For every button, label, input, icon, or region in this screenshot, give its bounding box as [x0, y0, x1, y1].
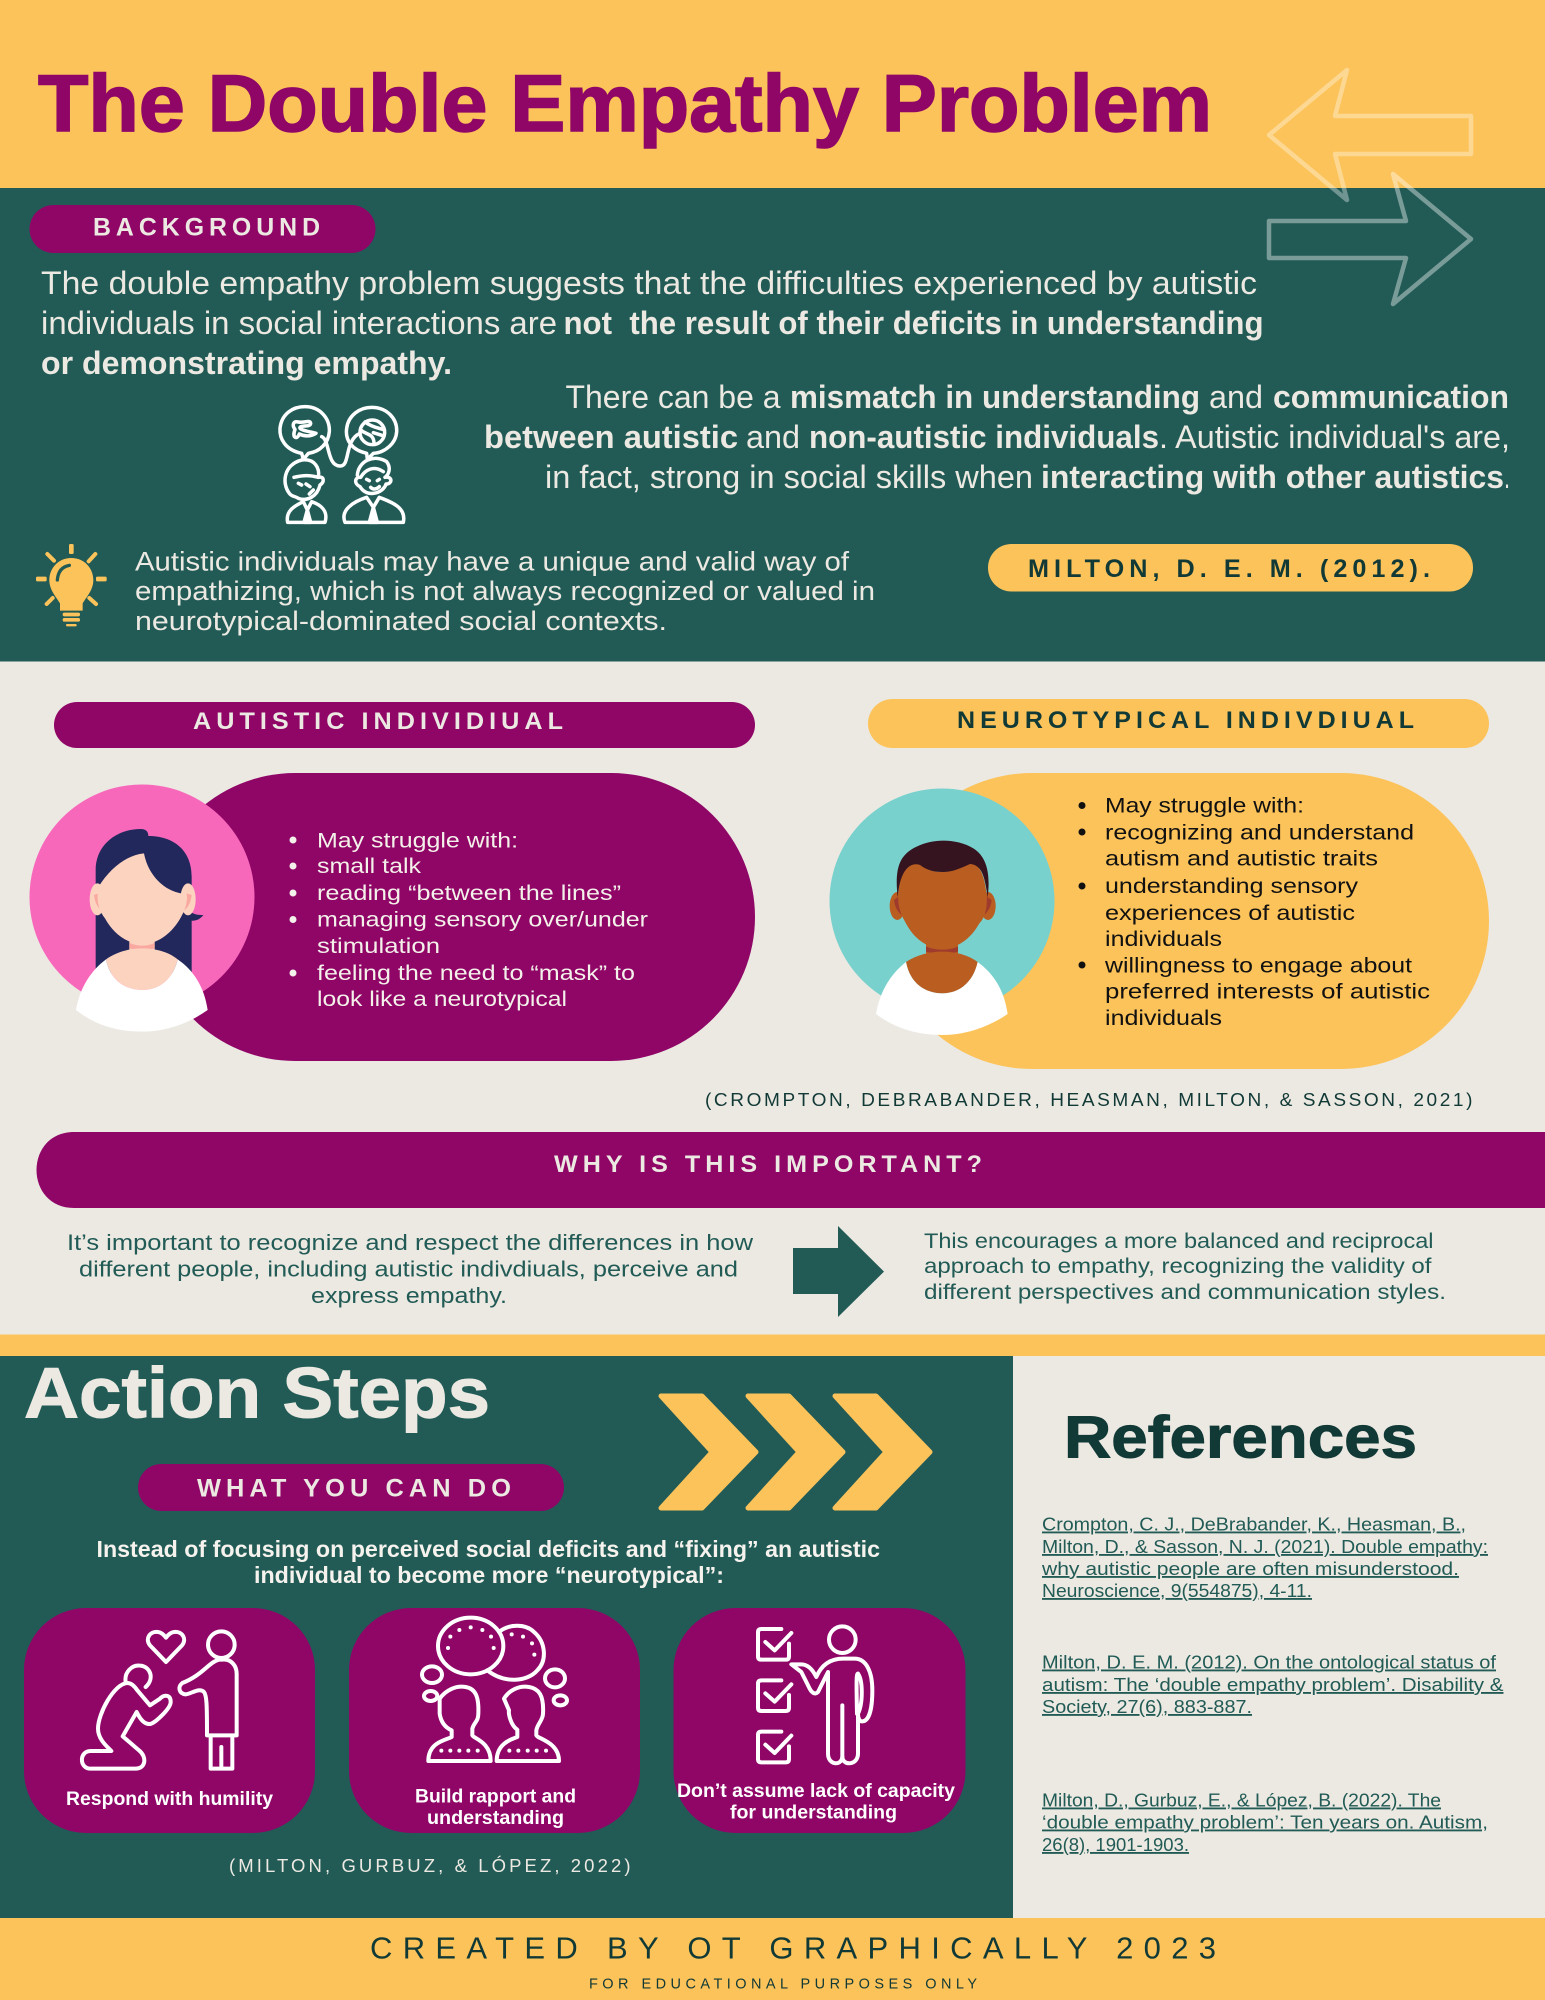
pill: what you can do — [138, 1464, 564, 1511]
text block: mismatch: communication — [1273, 379, 1509, 415]
text block: instead of — [96, 1536, 880, 1588]
text block: reciprocal approach: This encourages a more balanced and reciprocal — [924, 1229, 1434, 1253]
purple blob — [151, 773, 755, 1061]
card: build rapport: Build rapport and — [415, 1787, 576, 1808]
panel: header — [0, 0, 1545, 188]
list: autistic struggles: May struggle with: — [317, 828, 518, 852]
footer note: FOR EDUCATIONAL PURPOSES ONLY — [589, 1977, 977, 1993]
text block: definition: individuals in social interactions are — [41, 305, 557, 341]
icon: person with checklist — [758, 1626, 872, 1763]
reference: Crompton: Neuroscience, 9(554875), 4-11. — [1042, 1580, 1312, 1601]
list: autistic struggles: feeling the need to “mask” to — [317, 961, 635, 985]
text block: recognize differences: express empathy. — [311, 1283, 507, 1308]
text block: recognize differences: It’s important to recognize and respect the differences in how — [67, 1230, 753, 1255]
text block: mismatch: in fact, strong in social skills when — [545, 459, 1033, 495]
card: don't assume: for understanding — [730, 1803, 897, 1824]
text block: definition: or demonstrating empathy. — [41, 345, 452, 381]
yellow blob — [884, 773, 1489, 1069]
list: neurotypical struggles: individuals — [1105, 1006, 1222, 1030]
arrow — [793, 1226, 884, 1317]
heading: references: References — [1064, 1404, 1417, 1470]
heading pill: autistic: AUTISTIC INDIVIDIUAL — [193, 708, 568, 735]
text block: mismatch: and — [1209, 379, 1263, 415]
heading: action steps: Action Steps — [24, 1354, 490, 1433]
text block: instead of: Instead of focusing on perceived social deficits and “fixing” an autistic — [96, 1536, 880, 1562]
list: autistic struggles: look like a neurotypical — [317, 987, 567, 1011]
list: neurotypical struggles: autism and autistic traits — [1105, 846, 1378, 870]
panel: background — [0, 188, 1545, 662]
reference: Milton 2012 — [1042, 1652, 1504, 1717]
citation: Milton 2022: (MILTON, GURBUZ, & LÓPEZ, 2022) — [229, 1855, 630, 1876]
list: neurotypical struggles: individuals — [1105, 927, 1222, 951]
pink circle — [30, 784, 254, 1010]
icon: kneeling person and heart — [82, 1631, 237, 1769]
card: respond with humility: Respond with humility — [66, 1789, 273, 1810]
text block: mismatch — [484, 379, 1510, 495]
panel: action steps — [0, 1354, 1013, 1918]
reference: Milton 2022: ‘double empathy problem’: Ten years on. Autism, — [1042, 1812, 1488, 1832]
reference: Milton 2012: Milton, D. E. M. (2012). On the ontological status of — [1042, 1652, 1497, 1672]
pill: what you can do: WHAT YOU CAN DO — [197, 1474, 516, 1502]
text block: mismatch: and — [746, 419, 800, 455]
text block: valid empathy: neurotypical-dominated social contexts. — [135, 606, 667, 636]
title: The Double Empathy Problem — [38, 59, 1212, 149]
text block: mismatch: . — [1504, 459, 1510, 495]
list: neurotypical struggles — [1078, 794, 1430, 1030]
text block: valid empathy — [135, 546, 875, 636]
card: build rapport — [349, 1608, 640, 1833]
panel: autistic individual — [30, 702, 755, 1061]
text block: recognize differences — [67, 1230, 753, 1308]
citation: Crompton et al.: (CROMPTON, DEBRABANDER, HEASMAN, MILTON, & SASSON, 2021) — [705, 1089, 1475, 1110]
heading pill: autistic — [54, 702, 755, 748]
avatar: woman — [76, 829, 208, 1032]
chevrons — [661, 1396, 930, 1508]
list: neurotypical struggles: May struggle with: — [1105, 794, 1304, 818]
icon: lightbulb — [36, 544, 107, 626]
card: don't assume — [674, 1608, 966, 1833]
list: autistic struggles: managing sensory over/under — [317, 908, 648, 932]
list: neurotypical struggles: experiences of autistic — [1105, 901, 1355, 925]
text block: mismatch: There can be a — [566, 379, 781, 415]
decorative arrow: right — [1269, 174, 1471, 304]
heading pill: neurotypical: NEUROTYPICAL INDIVDIUAL — [957, 707, 1419, 734]
text block: instead of: individual to become more “neurotypical”: — [254, 1562, 724, 1588]
text block: reciprocal approach: different perspectives and communication styles. — [924, 1280, 1446, 1304]
text block: definition: The double empathy problem suggests that the difficulties experienced by autistic — [41, 265, 1257, 301]
reference: Crompton: Crompton, C. J., DeBrabander, K., Heasman, B., — [1042, 1514, 1466, 1534]
reference: Milton 2022: 26(8), 1901-1903. — [1042, 1834, 1189, 1855]
teal circle — [830, 788, 1054, 1014]
list: autistic struggles: reading “between the lines” — [317, 881, 621, 905]
card: don't assume: Don’t assume lack of capacity — [677, 1781, 955, 1802]
text block: valid empathy: Autistic individuals may have a unique and valid way of — [135, 546, 850, 576]
citation pill: MILTON, D. E. M. (2012). — [1028, 555, 1435, 583]
divider band — [0, 1334, 1545, 1356]
text block: recognize differences: different people, including autistic indivdiuals, perceive and — [79, 1256, 738, 1282]
icon: two people with speech bubbles — [280, 407, 404, 522]
reference: Crompton: why autistic people are often misunderstood. — [1041, 1558, 1459, 1579]
reference: Milton 2022: Milton, D., Gurbuz, E., & López, B. (2022). The — [1042, 1790, 1441, 1810]
card: respond with humility — [24, 1608, 315, 1833]
list: neurotypical struggles: preferred interests of autistic — [1105, 979, 1430, 1003]
panel: references — [1013, 1356, 1545, 1918]
reference: Crompton: Milton, D., & Sasson, N. J. (2021). Double empathy: — [1042, 1536, 1488, 1557]
banner — [36, 1132, 1545, 1208]
list: autistic struggles: small talk — [317, 854, 421, 878]
list: autistic struggles — [290, 828, 648, 1011]
text block: definition: not the result of their deficits in understanding — [564, 305, 1264, 341]
banner: WHY IS THIS IMPORTANT? — [554, 1151, 987, 1178]
heading pill: neurotypical — [868, 699, 1489, 748]
text block: mismatch: . Autistic individual's are, — [1159, 419, 1510, 455]
background pill — [30, 205, 376, 253]
list: neurotypical struggles: recognizing and understand — [1105, 820, 1414, 844]
text block: reciprocal approach — [924, 1229, 1446, 1304]
reference: Crompton — [1041, 1514, 1488, 1601]
text block: mismatch: non-autistic individuals — [809, 419, 1159, 455]
text block: definition — [41, 265, 1264, 381]
text block: reciprocal approach: approach to empathy, recognizing the validity of — [924, 1254, 1432, 1278]
list: neurotypical struggles: willingness to engage about — [1104, 954, 1412, 978]
panel: neurotypical individual — [830, 699, 1489, 1069]
citation pill — [988, 544, 1473, 592]
icon: two people sharing thoughts — [422, 1618, 567, 1761]
footer credit: CREATED BY OT GRAPHICALLY 2023 — [370, 1931, 1216, 1966]
list: neurotypical struggles: understanding sensory — [1105, 874, 1358, 898]
list: autistic struggles: stimulation — [317, 934, 440, 958]
reference: Milton 2012: Society, 27(6), 883-887. — [1042, 1696, 1252, 1717]
panel: why is this important — [36, 1132, 1545, 1317]
decorative arrow: left — [1269, 70, 1471, 200]
text block: valid empathy: empathizing, which is not always recognized or valued in — [135, 576, 875, 606]
panel: footer — [0, 1918, 1545, 2000]
text block: mismatch: mismatch in understanding — [790, 379, 1200, 415]
reference: Milton 2012: autism: The ‘double empathy problem’. Disability & — [1042, 1674, 1504, 1695]
text block: mismatch: interacting with other autistics — [1041, 459, 1504, 495]
background pill: BACKGROUND — [93, 214, 325, 242]
card: build rapport: understanding — [427, 1808, 564, 1829]
text block: mismatch: between autistic — [484, 419, 738, 455]
avatar: man — [876, 841, 1008, 1035]
reference: Milton 2022 — [1042, 1790, 1488, 1855]
